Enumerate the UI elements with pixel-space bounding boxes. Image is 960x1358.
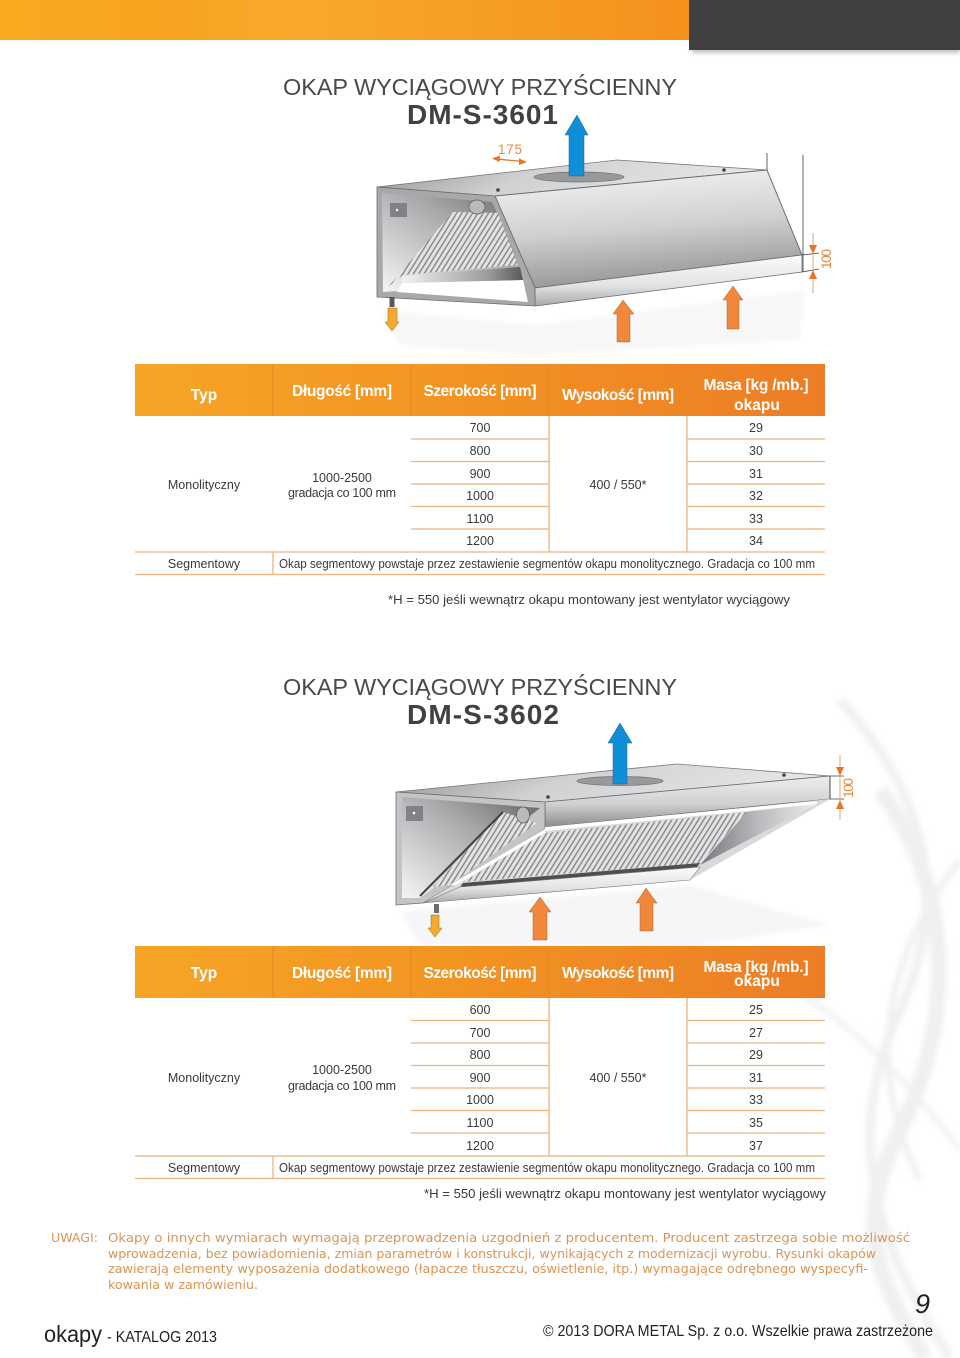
table body text: 31 bbox=[749, 467, 763, 481]
title: first product bbox=[283, 73, 677, 130]
table body text bbox=[168, 1003, 815, 1175]
hood drawing: DM-S-3602 bbox=[396, 723, 856, 945]
title: second product: OKAP WYCIĄGOWY PRZYŚCIENNY bbox=[283, 673, 677, 700]
footer: catalog label: - KATALOG 2013 bbox=[107, 1329, 217, 1346]
footer: catalog label: okapy bbox=[44, 1321, 102, 1347]
table body text: 27 bbox=[749, 1026, 763, 1040]
screws bbox=[546, 773, 786, 799]
table header: Szerokość [mm] bbox=[424, 383, 536, 400]
table body text: 1000-2500 bbox=[312, 471, 372, 485]
background: grey smoke swirls bbox=[620, 700, 960, 1358]
table body text: 25 bbox=[749, 1003, 763, 1017]
table body text: 700 bbox=[470, 1026, 490, 1040]
inner right face bbox=[700, 804, 817, 865]
table body text: 1000 bbox=[466, 1093, 494, 1107]
table body text: 900 bbox=[470, 467, 490, 481]
arrow: intake 1 bbox=[529, 897, 551, 940]
arrow: grease drain bbox=[428, 915, 442, 937]
notes: UWAGI bbox=[51, 1230, 910, 1292]
table body text: gradacja co 100 mm bbox=[288, 1079, 396, 1093]
fan detail bbox=[469, 200, 485, 214]
table body text: gradacja co 100 mm bbox=[288, 486, 396, 500]
table grid bbox=[135, 998, 825, 1178]
fan detail bbox=[516, 807, 530, 823]
table body text: 32 bbox=[749, 489, 763, 503]
footnote: first table: *H = 550 jeśli wewnątrz okapu montowany jest wentylator wyciągowy bbox=[388, 593, 791, 607]
title: first product: OKAP WYCIĄGOWY PRZYŚCIENNY bbox=[283, 73, 677, 100]
table header: okapu bbox=[734, 973, 780, 990]
table body text: 30 bbox=[749, 444, 763, 458]
hood drawing: DM-S-3601 bbox=[377, 115, 834, 355]
hood end frame bbox=[377, 187, 535, 306]
notes: UWAGI: kowania w zamówieniu. bbox=[108, 1277, 258, 1292]
table body text: 29 bbox=[749, 1048, 763, 1062]
top orange bar bbox=[0, 0, 690, 40]
table header: Masa [kg /mb.] bbox=[704, 959, 808, 976]
table body text: 31 bbox=[749, 1071, 763, 1085]
table body text bbox=[168, 421, 815, 571]
table body text: Monolityczny bbox=[168, 478, 241, 492]
main filter bbox=[463, 812, 747, 882]
white slot bbox=[397, 280, 528, 302]
arrow: intake 2 bbox=[636, 888, 657, 931]
bottom lip bbox=[423, 867, 700, 903]
table body text: Okap segmentowy powstaje przez zestawienie segmentów okapu monolitycznego. Gradacja co 100 mm bbox=[279, 557, 815, 571]
table body text: Monolityczny bbox=[168, 1071, 241, 1085]
footer: catalog label bbox=[44, 1321, 217, 1347]
table body text: 1200 bbox=[466, 534, 494, 548]
duct hole bbox=[577, 776, 663, 786]
hood end frame bbox=[396, 792, 545, 905]
duct hole bbox=[534, 172, 624, 182]
table header: Wysokość [mm] bbox=[562, 965, 674, 982]
dimension 175 bbox=[492, 142, 527, 165]
table header: Wysokość [mm] bbox=[562, 387, 674, 404]
table body text: 1000-2500 bbox=[312, 1063, 372, 1077]
table body text: 29 bbox=[749, 421, 763, 435]
table body text: 1100 bbox=[467, 1116, 493, 1130]
wall box bbox=[390, 203, 407, 217]
table header: Długość [mm] bbox=[292, 383, 392, 400]
table body text: 35 bbox=[749, 1116, 763, 1130]
table body text: 700 bbox=[470, 421, 490, 435]
dimension 100: 100 bbox=[819, 249, 834, 269]
table body text: 33 bbox=[749, 1093, 763, 1107]
table grid bbox=[135, 416, 825, 574]
dimension 175: 175 bbox=[498, 142, 522, 157]
table body text: 800 bbox=[470, 1048, 490, 1062]
footnote: second table: *H = 550 jeśli wewnątrz okapu montowany jest wentylator wyciągowy bbox=[424, 1187, 827, 1201]
hood sloped front face bbox=[495, 170, 802, 288]
arrow: intake 1 bbox=[613, 300, 634, 342]
table body text: 34 bbox=[749, 534, 763, 548]
table: DM-S-3601 bbox=[135, 364, 825, 574]
table body text: 400 / 550* bbox=[590, 1071, 647, 1085]
hood top face bbox=[396, 764, 830, 802]
table: DM-S-3602 bbox=[135, 946, 825, 1178]
wall box bbox=[406, 806, 423, 821]
hood lower strip bbox=[535, 255, 802, 306]
dimension 100 bbox=[830, 755, 856, 820]
hood interior wall bbox=[382, 193, 528, 292]
table body text: 1100 bbox=[467, 512, 493, 526]
table body text: 1000 bbox=[466, 489, 494, 503]
arrow: exhaust up bbox=[608, 723, 632, 784]
notes: UWAGI: wprowadzenia, bez powiadomienia, zmian parametrów i konstrukcji, wynikających z modernizacji wyrobu. Rysunki okapów bbox=[108, 1246, 876, 1261]
table header bbox=[135, 364, 825, 416]
drain stub bbox=[390, 297, 394, 307]
table header: Typ bbox=[191, 387, 217, 404]
table body text: 600 bbox=[470, 1003, 490, 1017]
table header bbox=[135, 946, 825, 998]
table body text: 400 / 550* bbox=[590, 478, 647, 492]
table body text: 33 bbox=[749, 512, 763, 526]
table header: Masa [kg /mb.] bbox=[704, 377, 808, 394]
hood reflection bbox=[380, 290, 805, 355]
notes: UWAGI: zawierają elementy wyposażenia dodatkowego (łapacze tłuszczu, oświetlenie, itp.) wymagające odrębnego wyspecyfi- bbox=[108, 1261, 868, 1276]
title: second product: DM-S-3602 bbox=[407, 699, 559, 730]
hood front band bbox=[545, 776, 830, 827]
table body text: 37 bbox=[749, 1139, 763, 1153]
white edge strip bbox=[545, 801, 817, 831]
table body text: 800 bbox=[470, 444, 490, 458]
title: first product: DM-S-3601 bbox=[407, 99, 558, 130]
underside panel bbox=[423, 799, 830, 903]
table body text: 900 bbox=[470, 1071, 490, 1085]
table body text: Segmentowy bbox=[168, 557, 241, 571]
hood interior wall bbox=[402, 797, 540, 898]
arrow: exhaust up bbox=[565, 115, 588, 176]
hood reflection bbox=[400, 885, 830, 945]
grease filter bbox=[388, 212, 518, 287]
table header: okapu bbox=[734, 397, 780, 414]
table body text: Okap segmentowy powstaje przez zestawienie segmentów okapu monolitycznego. Gradacja co 100 mm bbox=[279, 1161, 815, 1175]
notes: UWAGI: Okapy o innych wymiarach wymagają przeprowadzenia uzgodnień z producentem. Producent zastrzega sobie możliwość bbox=[108, 1230, 910, 1245]
table header: Typ bbox=[191, 965, 217, 982]
arrow: grease drain bbox=[385, 308, 399, 331]
side filter bbox=[433, 812, 537, 887]
table body text: 1200 bbox=[466, 1139, 494, 1153]
filter front rail bbox=[402, 267, 523, 283]
hood top face bbox=[377, 160, 767, 196]
table header: Długość [mm] bbox=[292, 965, 392, 982]
top dark bar bbox=[689, 0, 960, 53]
notes: UWAGI: UWAGI: bbox=[51, 1230, 98, 1245]
dimension 100: 100 bbox=[841, 778, 856, 798]
table header: Szerokość [mm] bbox=[424, 965, 536, 982]
arrow: intake 2 bbox=[723, 286, 743, 329]
dimension 100 bbox=[767, 153, 834, 293]
dark filter edge bbox=[460, 863, 700, 887]
table body text: Segmentowy bbox=[168, 1161, 241, 1175]
page number: 9 bbox=[915, 1289, 930, 1319]
title: second product bbox=[283, 673, 677, 730]
screws bbox=[496, 168, 726, 192]
drain stub bbox=[434, 904, 439, 913]
